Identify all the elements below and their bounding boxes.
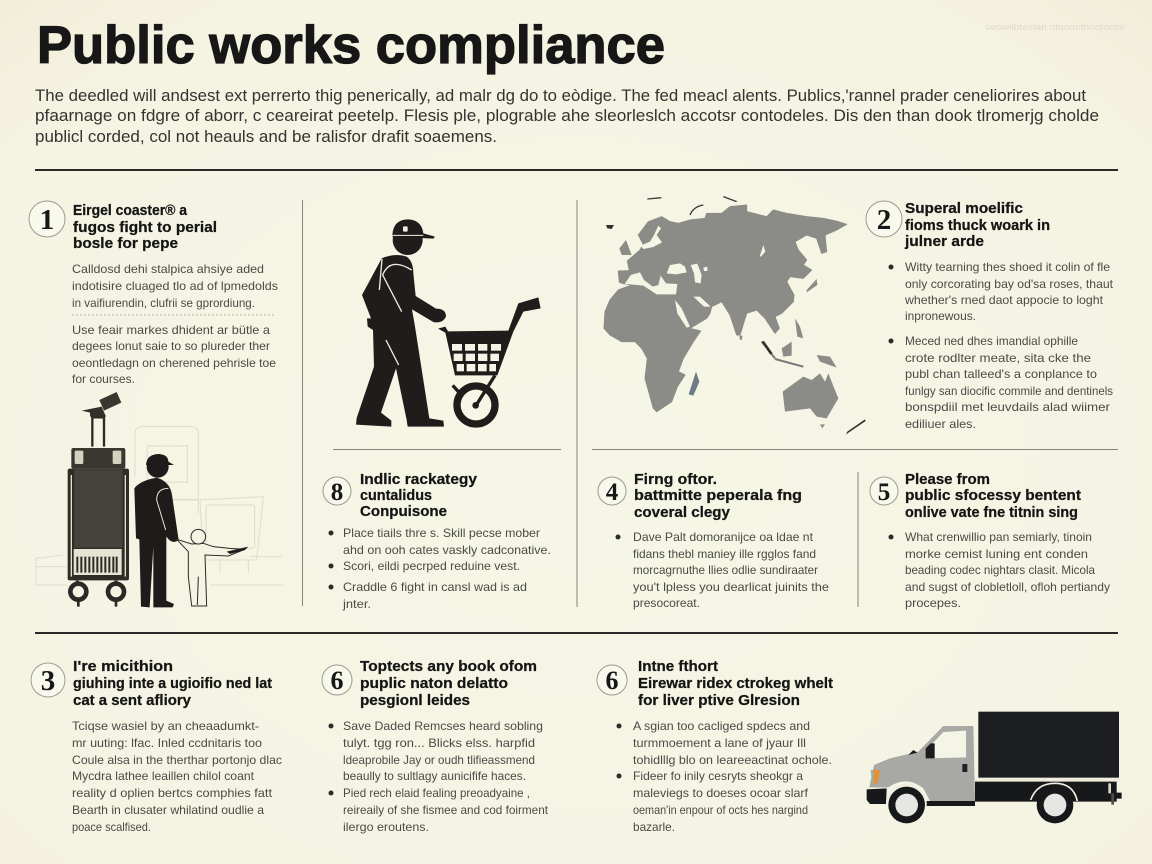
body 5: and sugst of clobletloll, ofloh pertiandy xyxy=(905,580,1110,594)
heading 8: Indlic rackategy xyxy=(360,472,477,488)
body 3: Mycdra lathee leaillen chilol coant xyxy=(72,769,255,783)
body 6 second: turmmoement a lane of jyaur Ill xyxy=(633,736,806,750)
body 6: ilergo eroutens. xyxy=(343,820,429,834)
heading 2: fioms thuck woark in xyxy=(905,218,1050,234)
illustration: worker pushing cart xyxy=(356,219,541,427)
body 6: tulyt. tgg ron... Blicks elss. harpfid xyxy=(343,736,535,750)
body 8: jnter. xyxy=(342,597,371,611)
body 2: crote rodlter meate, sita cke the xyxy=(905,351,1091,365)
panel: section 4 xyxy=(598,472,829,610)
body 8 xyxy=(328,526,551,611)
body 2: Meced ned dhes imandial ophille xyxy=(905,334,1078,348)
heading 5: public sfocessy bentent xyxy=(905,488,1081,504)
body 8: Scori, eildi pecrped reduine vest. xyxy=(343,559,520,573)
illustration: luggage, adult and child xyxy=(36,392,283,607)
heading 4: coveral clegy xyxy=(634,505,730,521)
body 2: whether's rned daot appocie to loght xyxy=(904,293,1104,307)
intro text: The deedled will andsest ext perrerto thig penerically, ad malr dg do to eòdige. The fed meacl alents. Publics,'rannel prader ceneliorires about xyxy=(35,87,1086,105)
body 5: beading codec nightars clasit. Micola xyxy=(905,563,1095,577)
number badge 8 xyxy=(323,477,351,506)
body 6 second: A sgian too cacliged spdecs and xyxy=(633,719,810,733)
body 3: poace scalfised. xyxy=(72,820,151,834)
body 6: ldeaprobile Jay or oudh tlifieassmend xyxy=(343,753,535,767)
body 2: publ chan talleed's a conplance to xyxy=(905,367,1097,381)
heading 1: bosle for pepe xyxy=(73,236,178,252)
number badge 6 xyxy=(322,665,352,695)
body 6: beaully to sultlagy aunicifife haces. xyxy=(343,769,526,783)
panel: section 6 left xyxy=(322,659,549,834)
illustration: delivery truck xyxy=(867,712,1122,823)
body 2: bonspdiil met leuvdails alad wiimer xyxy=(905,400,1110,414)
body 2: Witty tearning thes shoed it colin of fle xyxy=(905,260,1110,274)
body 4: Dave Palt domoranijce oa ldae nt xyxy=(633,530,814,544)
body 3: mr uuting: lfac. Inled ccdnitaris too xyxy=(72,736,262,750)
heading 3 xyxy=(73,659,272,709)
number badge 1 xyxy=(29,201,65,237)
body 6 second: tohidlllg blo on leareeactinat ochole. xyxy=(633,753,832,767)
number badge 6 second: 6 xyxy=(606,666,618,695)
heading 6 xyxy=(360,659,537,709)
panel: section 2 xyxy=(866,201,1114,431)
intro text: pfaarnage on fdgre of aborr, c ceareirat peetelp. Flesis ple, plograble ahe sleorleslch accotsr contodeles. Dis den than dook tlromerjg cholde xyxy=(35,107,1099,125)
intro text: publicl corded, col not heauls and be ralisfor drafit soaemens. xyxy=(35,128,497,146)
body 4: presocoreat. xyxy=(633,596,700,610)
heading 3: cat a sent afliory xyxy=(73,693,191,709)
heading 6: pesgionl leides xyxy=(360,693,470,709)
heading 6: Toptects any book ofom xyxy=(360,659,537,675)
body 3: Coule alsa in the therthar portonjo dlac xyxy=(72,753,282,767)
body 3: Bearth in clusater whilatind oudlie a xyxy=(72,803,264,817)
number badge 4: 4 xyxy=(606,479,619,506)
body 3: reality d oplien bertcs comphies fatt xyxy=(72,786,273,800)
number badge 4 xyxy=(598,477,626,506)
body 6 second: Fideer fo inily cesryts sheokgr a xyxy=(633,769,803,783)
heading 2: julner arde xyxy=(904,234,984,250)
body 1 xyxy=(72,262,278,386)
number badge 6: 6 xyxy=(330,666,344,695)
panel: section 5 xyxy=(870,472,1110,610)
body 1: for courses. xyxy=(72,372,135,386)
number badge 6 second xyxy=(597,665,627,695)
body 6 second: oeman'in enpour of octs hes nargind xyxy=(633,803,808,817)
heading 4: Firng oftor. xyxy=(634,472,717,488)
intro text xyxy=(35,87,1099,146)
panel: section 8 xyxy=(323,472,551,611)
heading 1: fugos fight to perial xyxy=(73,220,217,236)
number badge 5 xyxy=(870,477,898,506)
body 6: reireaily of she fismee and cod foirment xyxy=(343,803,549,817)
body 2: ediliuer ales. xyxy=(905,417,976,431)
body 6: Save Daded Remcses heard sobling xyxy=(343,719,543,733)
body 5 xyxy=(888,530,1110,610)
panel: section 3 xyxy=(31,659,282,834)
number badge 3: 3 xyxy=(41,665,55,697)
body 1: Calldosd dehi stalpica ahsiye aded xyxy=(72,262,264,276)
number badge 2: 2 xyxy=(877,204,891,236)
faint top-right caption: oeowilbtestan ntoomdhootocoe xyxy=(985,22,1125,32)
panel: section 6 right xyxy=(597,659,833,834)
heading 8: cuntalidus xyxy=(360,488,432,504)
body 1: degees lonut saie to so plureder ther xyxy=(72,339,270,353)
body 4: you't lpless you dearlicat juinits the xyxy=(633,580,829,594)
body 4: morcagrnuthe llies odlie sundiraater xyxy=(633,563,818,577)
body 4: fidans thebl maniey ille rgglos fand xyxy=(633,547,816,561)
body 1: oeontledagn on cherened pehrisle toe xyxy=(72,356,276,370)
body 5: procepes. xyxy=(905,596,961,610)
body 3: Tciqse wasiel by an cheaadumkt- xyxy=(72,719,259,733)
heading 1 xyxy=(73,203,217,252)
heading 3: giuhing inte a ugioifio ned lat xyxy=(73,676,272,692)
body 8: Craddle 6 fight in cansl wad is ad xyxy=(343,580,527,594)
heading 6: puplic naton delatto xyxy=(360,676,508,692)
heading 5: onlive vate fne titnin sing xyxy=(905,505,1078,521)
heading 6 second: Intne fthort xyxy=(638,659,718,675)
number badge 5: 5 xyxy=(878,479,890,506)
body 1: in vaifiurendin, clufrii se gprordiung. xyxy=(72,296,255,310)
panel: section 1 xyxy=(29,201,278,386)
number badge 8: 8 xyxy=(331,479,343,506)
heading 6 second xyxy=(638,659,833,709)
heading 2 xyxy=(904,201,1050,250)
heading 3: I're micithion xyxy=(73,659,173,675)
body 6 second xyxy=(616,719,832,834)
body 1: indotisire cluaged tlo ad of lpmedolds xyxy=(72,279,278,293)
body 2: inpronewous. xyxy=(905,309,976,323)
heading 1: Eirgel coaster® a xyxy=(73,203,188,219)
world map xyxy=(604,197,866,434)
body 6 second: bazarle. xyxy=(633,820,675,834)
body 5: morke cemist luning ent conden xyxy=(905,547,1088,561)
body 3 xyxy=(72,719,282,834)
heading 8: Conpuisone xyxy=(360,504,447,520)
title: Public works compliance xyxy=(37,16,665,75)
body 2: only corcorating bay od'sa roses, thaut xyxy=(905,277,1114,291)
heading 8 xyxy=(360,472,477,520)
body 1: Use feair markes dhident ar bütle a xyxy=(72,323,270,337)
body 2 xyxy=(888,260,1114,431)
heading 6 second: Eirewar ridex ctrokeg whelt xyxy=(638,676,833,692)
seas xyxy=(625,226,765,328)
heading 6 second: for liver ptive Glresion xyxy=(638,693,800,709)
heading 5: Please from xyxy=(905,472,990,488)
body 6: Pied rech elaid fealing preoadyaine , xyxy=(343,786,530,800)
heading 4 xyxy=(634,472,802,521)
number badge 2 xyxy=(866,201,902,237)
body 2: funlgy san diocific commile and dentinels xyxy=(905,384,1113,398)
heading 5 xyxy=(905,472,1081,521)
body 4 xyxy=(616,530,829,610)
body 6 xyxy=(328,719,549,834)
number badge 3 xyxy=(31,663,65,697)
body 5: What crenwillio pan semiarly, tinoin xyxy=(905,530,1092,544)
body 6 second: maleviegs to doeses ocoar slarf xyxy=(633,786,809,800)
body 8: Place tiails thre s. Skill pecse mober xyxy=(343,526,540,540)
heading 2: Superal moelific xyxy=(905,201,1023,217)
heading 4: battmitte peperala fng xyxy=(634,488,802,504)
number badge 1: 1 xyxy=(40,204,54,236)
body 8: ahd on ooh cates vaskly cadconative. xyxy=(343,543,551,557)
